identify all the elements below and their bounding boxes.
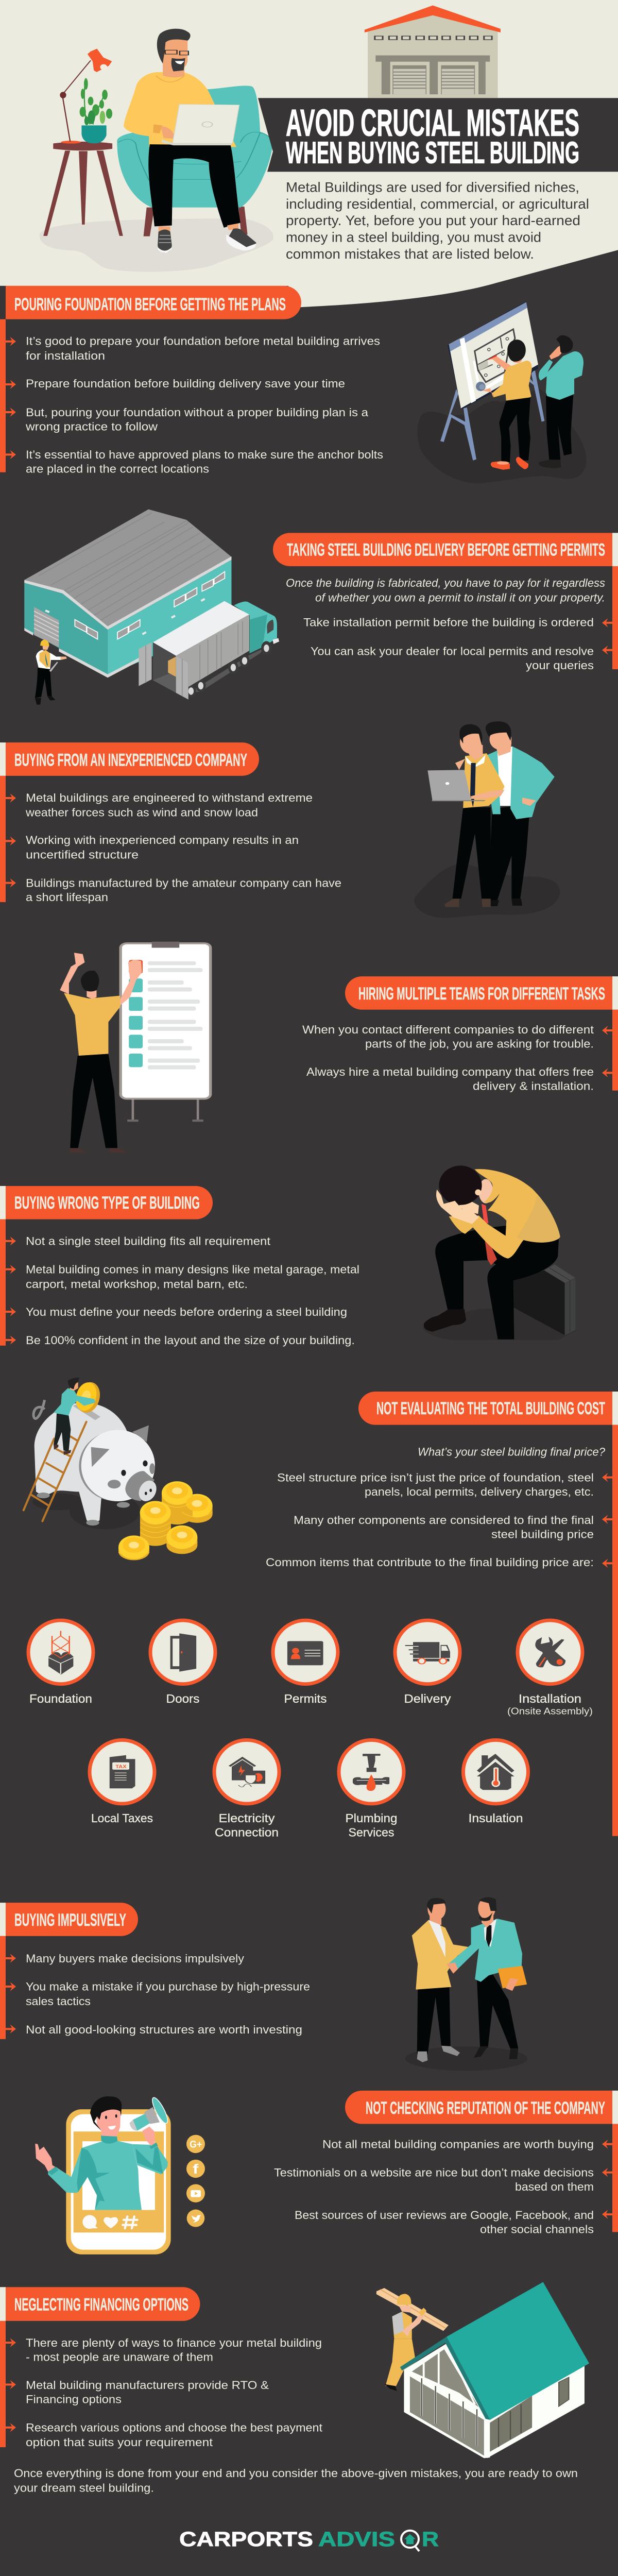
bullet list: Working with inexperienced company results in an	[26, 833, 299, 846]
panel: inexperienced company	[0, 721, 560, 918]
closing text: your dream steel building.	[14, 2481, 154, 2494]
icon labels: Doors	[166, 1692, 200, 1706]
bullet list: Prepare foundation before building delivery save your time	[26, 377, 345, 390]
icon circles: price components	[28, 1620, 582, 1804]
illustration: two businessmen shaking hands	[405, 1897, 527, 2071]
heading	[0, 286, 301, 319]
bullet list: You make a mistake if you purchase by high-pressure	[26, 1980, 310, 1993]
intro paragraph	[286, 180, 589, 262]
bullet list: Metal building comes in many designs like metal garage, metal	[26, 1263, 359, 1276]
intro paragraph: common mistakes that are listed below.	[286, 246, 534, 262]
closing text: Once everything is done from your end and you consider the above-given mistakes, you are ready to own	[14, 2466, 578, 2480]
bullet list: Many other components are considered to find the final	[294, 1513, 594, 1527]
icon: wrench and screwdriver	[535, 1637, 565, 1667]
bullet list: It’s essential to have approved plans to make sure the anchor bolts	[26, 448, 383, 461]
bullet list: Not a single steel building fits all requirement	[26, 1234, 271, 1248]
illustration: steel building with orange roof	[365, 6, 501, 98]
bullet list: weather forces such as wind and snow load	[25, 806, 258, 819]
icon: local taxes document: TAX	[115, 1764, 127, 1769]
heading: BUYING IMPULSIVELY	[14, 1911, 126, 1930]
bullet list	[302, 1010, 618, 1093]
illustration: warehouse with truck and engineer	[24, 510, 279, 705]
bullet list: Buildings manufactured by the amateur company can have	[26, 876, 341, 890]
icon: delivery truck	[405, 1642, 450, 1664]
bullet list: for installation	[26, 349, 105, 362]
panel: taking delivery before permits	[24, 510, 618, 705]
bullet list	[0, 319, 383, 476]
illustration: man with megaphone in phone	[35, 2096, 205, 2255]
bullet list: Testimonials on a website are nice but don’t make decisions	[274, 2166, 594, 2179]
bullet list: Many buyers make decisions impulsively	[26, 1952, 245, 1965]
heading	[0, 2287, 200, 2321]
icon labels: Services	[348, 1826, 394, 1840]
heading: NEGLECTING FINANCING OPTIONS	[14, 2295, 188, 2314]
illustration: man with megaphone in phone: G+	[190, 2140, 202, 2150]
bullet list: It’s good to prepare your foundation before metal building arrives	[26, 334, 380, 348]
bullet list	[274, 2124, 618, 2235]
bullet list: delivery & installation.	[473, 1079, 594, 1093]
bullet list: Not all metal building companies are worth buying	[322, 2138, 594, 2151]
icon labels: Connection	[215, 1826, 279, 1840]
bullet list: There are plenty of ways to finance your metal building	[26, 2336, 322, 2349]
bullet list: Steel structure price isn’t just the price of foundation, steel	[277, 1471, 594, 1484]
bullet list: wrong practice to follow	[25, 420, 158, 433]
bullet list	[0, 1936, 310, 2039]
icon labels	[29, 1692, 593, 1840]
bullet list: option that suits your requirement	[26, 2435, 213, 2449]
heading	[345, 2091, 618, 2124]
heading	[0, 1186, 213, 1219]
icon labels: (Onsite Assembly)	[507, 1706, 593, 1716]
bullet list: other social channels	[480, 2223, 594, 2235]
heading: POURING FOUNDATION BEFORE GETTING THE PLANS	[14, 295, 286, 314]
icon labels: Foundation	[29, 1692, 92, 1706]
heading	[273, 533, 618, 566]
bullet list: Once the building is fabricated, you have to pay for it regardless	[286, 576, 605, 589]
heading	[345, 976, 618, 1010]
heading: BUYING FROM AN INEXPERIENCED COMPANY	[14, 751, 247, 770]
bullet list: sales tactics	[26, 1994, 91, 2008]
icon: foundation	[48, 1631, 73, 1674]
bullet list: a short lifespan	[26, 890, 108, 904]
bullet list	[0, 1219, 359, 1347]
icon labels: Plumbing	[345, 1811, 398, 1825]
icon: insulation house	[477, 1754, 514, 1790]
intro paragraph: money in a steel building, you must avoid	[286, 230, 541, 245]
bullet list	[266, 1425, 618, 1836]
bullet list: carport, metal workshop, metal barn, etc.	[26, 1277, 248, 1291]
bullet list: based on them	[515, 2180, 594, 2193]
icon labels: Local Taxes	[91, 1811, 153, 1825]
logo: Carports Advisor: ADVIS	[318, 2528, 395, 2551]
bullet list: Take installation permit before the building is ordered	[303, 616, 594, 629]
bullet list: of whether you own a permit to install it on your property.	[315, 591, 605, 604]
bullet list: But, pouring your foundation without a proper building plan is a	[26, 405, 368, 419]
bullet list: Always hire a metal building company that offers free	[306, 1065, 594, 1078]
title band	[258, 98, 618, 172]
icon: electricity connection	[229, 1757, 265, 1787]
panel: hero header	[40, 6, 618, 272]
illustration: stressed man on briefcase	[422, 1165, 577, 1340]
icon: plumbing faucet and wrench	[353, 1754, 389, 1791]
intro paragraph: including residential, commercial, or agricultural	[286, 196, 589, 212]
bullet list	[286, 566, 618, 672]
panel: financing options	[0, 2282, 589, 2494]
illustration: man with laptop on armchair	[40, 29, 273, 272]
illustration: two people at drafting board	[418, 301, 587, 483]
bullet list: Financing options	[26, 2393, 122, 2406]
bullet list: are placed in the correct locations	[26, 462, 209, 476]
bullet list: You can ask your dealer for local permits and resolve	[311, 645, 594, 658]
bullet list	[0, 776, 341, 904]
icon: permit card	[287, 1641, 323, 1665]
bullet list: your queries	[526, 658, 594, 672]
illustration: person at checklist board	[60, 942, 211, 1153]
illustration: man with megaphone in phone: f	[193, 2161, 199, 2177]
bullet list: Metal buildings are engineered to withstand extreme	[26, 791, 313, 804]
icon labels: Permits	[284, 1692, 327, 1706]
icon labels: Insulation	[469, 1811, 523, 1825]
bullet list: What’s your steel building final price?	[418, 1445, 605, 1458]
illustration: two men with laptop	[414, 721, 560, 918]
panel: buying impulsively	[0, 1897, 527, 2071]
bullet list: - most people are unaware of them	[26, 2350, 213, 2363]
intro paragraph: property. Yet, before you put your hard-earned	[286, 213, 580, 228]
bullet list: When you contact different companies to do different	[302, 1023, 594, 1036]
icon: local taxes document	[110, 1755, 135, 1788]
bullet list: Not all good-looking structures are worth investing	[26, 2023, 302, 2036]
icon labels: Electricity	[218, 1811, 275, 1825]
bullet list: Research various options and choose the best payment	[26, 2421, 323, 2434]
intro paragraph: Metal Buildings are used for diversified niches,	[286, 180, 579, 195]
bullet list: panels, local permits, delivery charges, etc.	[365, 1485, 594, 1498]
bullet list: Metal building manufacturers provide RTO &	[26, 2378, 269, 2392]
heading	[358, 1392, 618, 1425]
bullet list: You must define your needs before ordering a steel building	[26, 1305, 347, 1318]
bullet list: Common items that contribute to the final building price are:	[266, 1555, 594, 1569]
icon: door	[170, 1633, 196, 1672]
panel: reputation	[35, 2091, 618, 2255]
logo: Carports Advisor: CARPORTS	[179, 2528, 313, 2551]
illustration: worker carrying planks by house	[376, 2282, 589, 2458]
panel: hiring multiple teams	[60, 942, 618, 1153]
logo: Carports Advisor	[179, 2528, 439, 2551]
bullet list: parts of the job, you are asking for trouble.	[365, 1037, 594, 1050]
panel: total building cost	[24, 1378, 618, 1840]
icon labels: Delivery	[404, 1692, 451, 1706]
bullet list: steel building price	[491, 1528, 594, 1540]
bullet list: Best sources of user reviews are Google, Facebook, and	[295, 2208, 594, 2222]
heading	[0, 1903, 138, 1936]
illustration: piggy bank with coins and ladder	[24, 1378, 213, 1560]
heading	[0, 742, 259, 776]
bullet list: uncertified structure	[26, 848, 139, 861]
title	[286, 101, 579, 170]
closing text	[14, 2466, 578, 2494]
panel: pouring foundation	[0, 286, 587, 483]
bullet list	[0, 2321, 323, 2449]
panel: wrong type of building	[0, 1165, 577, 1347]
logo: Carports Advisor: R	[422, 2528, 439, 2551]
heading: BUYING WRONG TYPE OF BUILDING	[14, 1193, 200, 1213]
icon labels: Installation	[519, 1692, 581, 1706]
bullet list: Be 100% confident in the layout and the size of your building.	[26, 1333, 355, 1347]
